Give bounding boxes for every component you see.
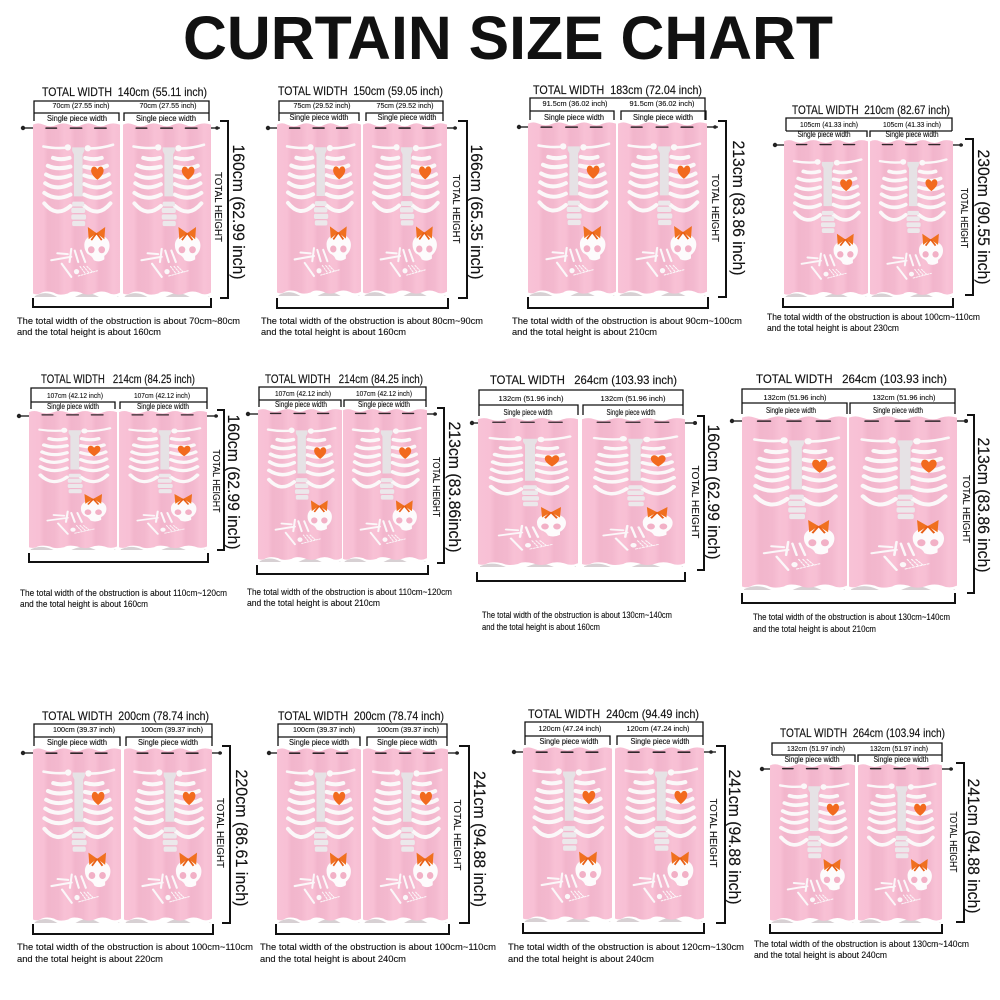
note: The total width of the obstruction is about 70cm~80cm bbox=[17, 316, 240, 327]
total width label: TOTAL WIDTH 264cm (103.93 inch) bbox=[490, 373, 677, 387]
bottom bracket bbox=[523, 923, 704, 933]
single piece labels: Single piece width bbox=[290, 113, 348, 122]
piece width labels bbox=[47, 391, 190, 400]
note: and the total height is about 160cm bbox=[17, 327, 161, 338]
total width label: TOTAL WIDTH 140cm (55.11 inch) bbox=[42, 85, 207, 99]
note: The total width of the obstruction is about 80cm~90cm bbox=[261, 316, 483, 327]
piece width labels: 107cm (42.12 inch) bbox=[275, 389, 331, 398]
piece width labels: 75cm (29.52 inch) bbox=[294, 101, 351, 110]
note bbox=[508, 942, 744, 965]
note bbox=[261, 316, 483, 338]
note: and the total height is about 240cm bbox=[508, 954, 654, 965]
height bracket bbox=[220, 121, 228, 298]
bottom bracket bbox=[277, 298, 448, 308]
piece width labels: 132cm (51.97 inch) bbox=[870, 744, 928, 753]
piece width labels bbox=[800, 120, 941, 129]
note bbox=[482, 610, 672, 633]
height bracket bbox=[956, 763, 964, 922]
single piece labels: Single piece width bbox=[378, 113, 436, 122]
bottom bracket bbox=[770, 924, 942, 933]
piece width labels: 107cm (42.12 inch) bbox=[134, 391, 190, 400]
width brackets bbox=[772, 743, 942, 762]
curtain panels bbox=[742, 416, 957, 592]
single piece labels: Single piece width bbox=[358, 400, 410, 409]
width brackets bbox=[530, 98, 706, 120]
curtain panels bbox=[277, 123, 447, 298]
single piece labels bbox=[47, 402, 189, 411]
height measurement: 241cm (94.88 inch) bbox=[964, 778, 983, 914]
total height label: TOTAL HEIGHT bbox=[214, 798, 225, 868]
note: The total width of the obstruction is about 100cm~110cm bbox=[260, 942, 496, 953]
curtain panels bbox=[33, 748, 212, 925]
height measurement: 241cm (94.88 inch) bbox=[725, 770, 744, 904]
single piece labels bbox=[289, 738, 437, 747]
bottom bracket bbox=[477, 572, 685, 581]
note: and the total height is about 240cm bbox=[260, 954, 406, 965]
note bbox=[753, 612, 950, 635]
piece width labels: 75cm (29.52 inch) bbox=[376, 101, 434, 110]
total height label: TOTAL HEIGHT bbox=[709, 174, 720, 242]
curtain panels bbox=[528, 122, 707, 298]
single piece labels bbox=[275, 400, 410, 409]
single piece labels: Single piece width bbox=[377, 738, 437, 747]
single piece labels: Single piece width bbox=[275, 400, 327, 409]
piece width labels bbox=[275, 389, 412, 398]
piece width labels: 100cm (39.37 inch) bbox=[377, 725, 439, 734]
piece width labels bbox=[498, 394, 666, 403]
note: The total width of the obstruction is about 130cm~140cm bbox=[482, 610, 672, 621]
single piece labels bbox=[544, 113, 693, 122]
height bracket bbox=[697, 416, 704, 570]
bottom bracket bbox=[783, 298, 953, 307]
height measurement: 213cm (83.86inch) bbox=[445, 422, 464, 552]
total height label: TOTAL HEIGHT bbox=[451, 800, 462, 870]
piece width labels: 107cm (42.12 inch) bbox=[47, 391, 103, 400]
width brackets bbox=[259, 387, 426, 407]
total width label: TOTAL WIDTH 214cm (84.25 inch) bbox=[265, 372, 423, 386]
height bracket bbox=[217, 410, 224, 550]
piece width labels bbox=[294, 101, 434, 110]
single piece labels: Single piece width bbox=[47, 738, 107, 747]
note bbox=[260, 942, 496, 965]
size unit: 264cm by 241cm bbox=[754, 726, 983, 961]
note bbox=[767, 312, 980, 334]
note bbox=[17, 316, 240, 338]
single piece labels: Single piece width bbox=[798, 130, 850, 139]
height bracket bbox=[459, 746, 469, 923]
single piece labels: Single piece width bbox=[289, 738, 349, 747]
size unit: 140cm by 160cm bbox=[17, 85, 248, 338]
single piece labels: Single piece width bbox=[47, 114, 107, 123]
height bracket bbox=[965, 139, 973, 295]
total height label: TOTAL HEIGHT bbox=[430, 457, 441, 517]
width brackets bbox=[278, 724, 447, 746]
piece width labels: 70cm (27.55 inch) bbox=[140, 101, 197, 110]
total height label: TOTAL HEIGHT bbox=[212, 172, 223, 242]
curtain panels bbox=[523, 747, 704, 924]
piece width labels: 105cm (41.33 inch) bbox=[800, 120, 858, 129]
single piece labels bbox=[504, 408, 656, 417]
note: The total width of the obstruction is about 130cm~140cm bbox=[753, 612, 950, 623]
curtain rod ends bbox=[267, 751, 459, 755]
size unit: 264cm by 160cm bbox=[470, 373, 723, 633]
total height label: TOTAL HEIGHT bbox=[689, 466, 700, 538]
height measurement: 213cm (83.86 inch) bbox=[729, 140, 748, 276]
single piece labels: Single piece width bbox=[873, 406, 923, 415]
single piece labels: Single piece width bbox=[886, 130, 938, 139]
piece width labels: 132cm (51.96 inch) bbox=[872, 393, 936, 402]
piece width labels: 100cm (39.37 inch) bbox=[141, 725, 203, 734]
curtain rod ends bbox=[17, 414, 218, 418]
single piece labels: Single piece width bbox=[874, 755, 928, 764]
single piece labels: Single piece width bbox=[137, 402, 189, 411]
total height label: TOTAL HEIGHT bbox=[210, 450, 221, 512]
note: and the total height is about 160cm bbox=[20, 599, 148, 610]
single piece labels bbox=[798, 130, 938, 139]
note: and the total height is about 210cm bbox=[753, 624, 876, 635]
size unit: 264cm by 213cm bbox=[730, 372, 993, 635]
curtain rod ends bbox=[730, 419, 968, 423]
height bracket bbox=[437, 408, 444, 563]
curtain rod ends bbox=[517, 125, 718, 129]
width brackets bbox=[34, 101, 209, 121]
note bbox=[20, 588, 227, 610]
single piece labels: Single piece width bbox=[784, 755, 840, 764]
note: The total width of the obstruction is about 100cm~110cm bbox=[17, 942, 253, 953]
total height label: TOTAL HEIGHT bbox=[707, 798, 718, 868]
piece width labels: 132cm (51.96 inch) bbox=[600, 394, 666, 403]
curtain rod ends bbox=[266, 126, 457, 130]
height measurement: 241cm (94.88 inch) bbox=[470, 771, 489, 907]
height bracket bbox=[718, 121, 726, 297]
curtain rod ends bbox=[760, 767, 953, 771]
width brackets bbox=[34, 724, 212, 746]
total width label: TOTAL WIDTH 150cm (59.05 inch) bbox=[278, 84, 443, 98]
size unit: 200cm by 220cm bbox=[17, 709, 253, 965]
piece width labels: 132cm (51.96 inch) bbox=[498, 394, 564, 403]
width brackets bbox=[742, 389, 955, 414]
piece width labels: 105cm (41.33 inch) bbox=[883, 120, 941, 129]
piece width labels: 132cm (51.97 inch) bbox=[787, 744, 845, 753]
single piece labels bbox=[47, 738, 198, 747]
curtain panels bbox=[258, 409, 427, 564]
total width label: TOTAL WIDTH 214cm (84.25 inch) bbox=[41, 372, 195, 386]
size unit: 214cm by 160cm bbox=[17, 372, 243, 610]
curtain rod ends bbox=[21, 126, 220, 130]
single piece labels: Single piece width bbox=[630, 737, 690, 746]
bottom bracket bbox=[528, 297, 708, 308]
curtain panels bbox=[277, 748, 448, 925]
piece width labels bbox=[542, 99, 695, 108]
total height label: TOTAL HEIGHT bbox=[947, 812, 958, 872]
single piece labels: Single piece width bbox=[540, 737, 598, 746]
single piece labels: Single piece width bbox=[606, 408, 656, 417]
note: The total width of the obstruction is about 90cm~100cm bbox=[512, 316, 742, 327]
title: CURTAIN SIZE CHART bbox=[183, 4, 833, 72]
curtain rod ends bbox=[512, 750, 716, 754]
piece width labels bbox=[538, 724, 690, 733]
single piece labels bbox=[766, 406, 923, 415]
single piece labels: Single piece width bbox=[544, 113, 604, 122]
size unit: 240cm by 241cm bbox=[508, 707, 744, 965]
note: The total width of the obstruction is about 120cm~130cm bbox=[508, 942, 744, 953]
single piece labels: Single piece width bbox=[138, 738, 198, 747]
piece width labels: 91.5cm (36.02 inch) bbox=[542, 99, 608, 108]
single piece labels: Single piece width bbox=[633, 113, 693, 122]
height measurement: 160cm (62.99 inch) bbox=[224, 414, 243, 550]
width brackets bbox=[786, 118, 952, 137]
curtain panels bbox=[29, 411, 207, 552]
single piece labels: Single piece width bbox=[47, 402, 99, 411]
note: The total width of the obstruction is about 110cm~120cm bbox=[247, 587, 452, 598]
single piece labels: Single piece width bbox=[766, 406, 816, 415]
note: The total width of the obstruction is about 100cm~110cm bbox=[767, 312, 980, 323]
curtain panels bbox=[770, 764, 942, 925]
piece width labels bbox=[787, 744, 928, 753]
note: and the total height is about 210cm bbox=[247, 598, 380, 609]
note: and the total height is about 160cm bbox=[482, 622, 600, 633]
note: and the total height is about 220cm bbox=[17, 954, 163, 965]
note bbox=[247, 587, 452, 609]
total width label: TOTAL WIDTH 183cm (72.04 inch) bbox=[533, 83, 702, 97]
height measurement: 160cm (62.99 inch) bbox=[704, 424, 723, 560]
note: and the total height is about 210cm bbox=[512, 327, 657, 338]
bottom bracket bbox=[742, 593, 955, 603]
height bracket bbox=[967, 415, 974, 593]
piece width labels: 91.5cm (36.02 inch) bbox=[630, 99, 695, 108]
note: and the total height is about 160cm bbox=[261, 327, 406, 338]
width brackets bbox=[279, 101, 443, 121]
single piece labels: Single piece width bbox=[136, 114, 196, 123]
single piece labels bbox=[47, 114, 196, 123]
piece width labels: 107cm (42.12 inch) bbox=[356, 389, 412, 398]
curtain panels bbox=[784, 140, 953, 299]
size unit: 214cm by 213cm bbox=[246, 372, 464, 609]
single piece labels: Single piece width bbox=[504, 408, 552, 417]
piece width labels bbox=[764, 393, 936, 402]
note bbox=[17, 942, 253, 965]
height measurement: 166cm (65.35 inch) bbox=[467, 144, 486, 280]
height measurement: 220cm (86.61 inch) bbox=[232, 770, 251, 906]
piece width labels: 132cm (51.96 inch) bbox=[764, 393, 827, 402]
height measurement: 160cm (62.99 inch) bbox=[229, 144, 248, 280]
size unit: 183cm by 213cm bbox=[512, 83, 748, 338]
size unit: 210cm by 230cm bbox=[767, 103, 993, 334]
width brackets bbox=[525, 722, 703, 745]
total height label: TOTAL HEIGHT bbox=[960, 475, 971, 543]
piece width labels: 120cm (47.24 inch) bbox=[626, 724, 690, 733]
piece width labels bbox=[52, 101, 197, 110]
total width label: TOTAL WIDTH 240cm (94.49 inch) bbox=[528, 707, 699, 721]
note: and the total height is about 240cm bbox=[754, 950, 887, 961]
width brackets bbox=[31, 388, 207, 409]
height measurement: 213cm (83.86 inch) bbox=[974, 438, 993, 572]
height bracket bbox=[458, 121, 467, 298]
width brackets bbox=[479, 390, 683, 416]
curtain rod ends bbox=[21, 751, 222, 755]
curtain rod ends bbox=[246, 412, 437, 416]
total height label: TOTAL HEIGHT bbox=[958, 188, 969, 248]
total width label: TOTAL WIDTH 264cm (103.93 inch) bbox=[756, 372, 947, 386]
note: and the total height is about 230cm bbox=[767, 323, 899, 334]
piece width labels: 100cm (39.37 inch) bbox=[53, 725, 115, 734]
piece width labels: 70cm (27.55 inch) bbox=[52, 101, 110, 110]
total width label: TOTAL WIDTH 200cm (78.74 inch) bbox=[278, 709, 444, 723]
single piece labels bbox=[784, 755, 928, 764]
note: The total width of the obstruction is about 110cm~120cm bbox=[20, 588, 227, 599]
note bbox=[754, 939, 969, 961]
bottom bracket bbox=[33, 298, 211, 307]
size unit: 200cm by 241cm bbox=[260, 709, 496, 965]
height bracket bbox=[716, 746, 725, 923]
curtain rod ends bbox=[773, 143, 963, 147]
total width label: TOTAL WIDTH 264cm (103.94 inch) bbox=[780, 726, 945, 740]
note bbox=[512, 316, 742, 338]
total width label: TOTAL WIDTH 200cm (78.74 inch) bbox=[42, 709, 209, 723]
height measurement: 230cm (90.55 inch) bbox=[974, 150, 993, 284]
bottom bracket bbox=[276, 924, 449, 934]
piece width labels: 120cm (47.24 inch) bbox=[538, 724, 602, 733]
single piece labels bbox=[540, 737, 690, 746]
piece width labels: 100cm (39.37 inch) bbox=[293, 725, 355, 734]
piece width labels bbox=[293, 725, 439, 734]
size unit: 150cm by 166cm bbox=[261, 84, 486, 338]
total width label: TOTAL WIDTH 210cm (82.67 inch) bbox=[792, 103, 950, 117]
curtain rod ends bbox=[470, 421, 697, 425]
single piece labels bbox=[290, 113, 436, 122]
bottom bracket bbox=[33, 924, 213, 934]
bottom bracket bbox=[29, 553, 208, 562]
total height label: TOTAL HEIGHT bbox=[450, 174, 461, 244]
curtain panels bbox=[33, 123, 211, 299]
piece width labels bbox=[53, 725, 203, 734]
curtain panels bbox=[478, 418, 685, 569]
height bracket bbox=[222, 746, 230, 923]
note: The total width of the obstruction is about 130cm~140cm bbox=[754, 939, 969, 950]
bottom bracket bbox=[257, 565, 428, 574]
